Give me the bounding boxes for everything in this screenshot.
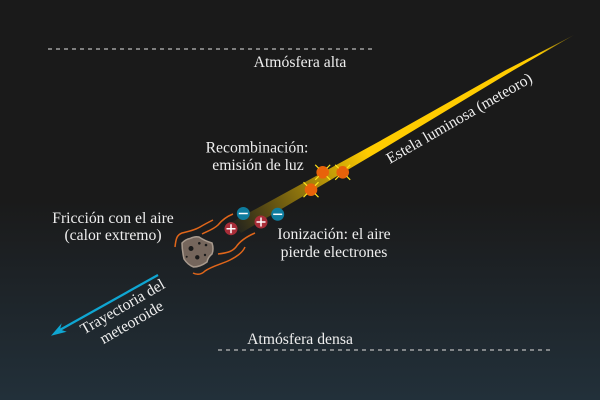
label: recombination: Recombinación: xyxy=(206,140,308,156)
electron 2 xyxy=(271,208,284,221)
friction heat lines xyxy=(175,214,255,274)
luminous trail xyxy=(232,35,574,233)
heading: dense atmosphere: Atmósfera densa xyxy=(247,331,353,348)
dense atmosphere line xyxy=(218,349,552,351)
label: friction: (calor extremo) xyxy=(64,227,162,244)
spark 3 xyxy=(304,182,318,197)
label: ionization: Ionización: el aire xyxy=(277,226,391,243)
spark 2 xyxy=(335,165,350,180)
label: ionization: pierde electrones xyxy=(281,244,387,261)
label: recombination: emisión de luz xyxy=(212,157,304,174)
heading: upper atmosphere: Atmósfera alta xyxy=(254,54,346,71)
recombination sparks xyxy=(304,165,350,197)
label: trajectory: Trayectoria del xyxy=(77,276,168,338)
ions xyxy=(224,207,284,235)
positive ion 2 xyxy=(254,216,268,228)
label: trajectory: meteoroide xyxy=(97,298,167,348)
upper atmosphere line xyxy=(48,48,372,50)
label: luminous trail: Estela luminosa (meteoro) xyxy=(384,70,535,167)
spark 1 xyxy=(315,165,330,180)
trajectory arrow xyxy=(51,275,158,336)
positive ion 1 xyxy=(224,222,238,235)
meteoroid rock xyxy=(182,237,213,267)
electron 1 xyxy=(237,207,250,220)
label: friction: Fricción con el aire xyxy=(52,210,174,227)
